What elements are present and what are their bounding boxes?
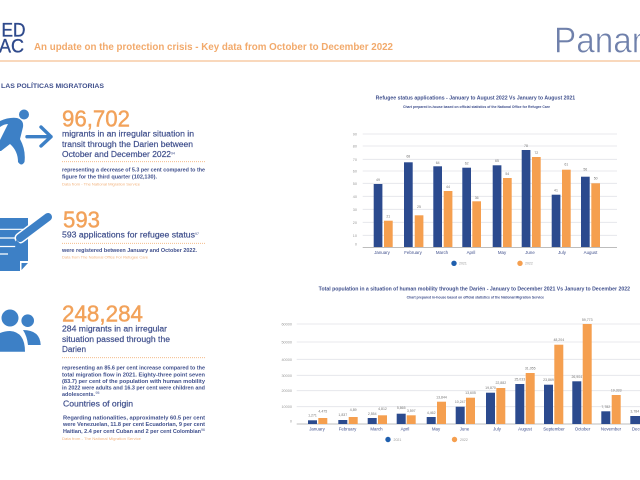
month labels: January	[309, 426, 326, 432]
month labels	[309, 426, 640, 432]
month labels: May	[432, 426, 441, 432]
month labels	[374, 250, 598, 255]
month labels: March	[370, 426, 383, 432]
legend	[451, 261, 533, 266]
value labels: 56	[583, 168, 587, 172]
legend: 2022	[525, 262, 533, 266]
lead text	[62, 325, 171, 354]
value labels: 3,597	[407, 409, 416, 413]
lead text: situation passed through the	[62, 335, 171, 344]
y axis labels: 90	[353, 132, 357, 136]
stat: 96,702: 96,702	[62, 106, 130, 132]
value labels: 72	[534, 151, 538, 155]
value labels: 62	[465, 162, 469, 166]
source: Data from - The National Migration Service	[62, 182, 140, 186]
month labels: August	[518, 426, 533, 432]
body text: were Venezuelan, 11.8 per cent Ecuadorian, 9 per cent	[62, 422, 205, 428]
value labels: 54	[505, 172, 509, 176]
source: Data from The National Office For Refugee Care	[62, 256, 148, 260]
month labels: May	[498, 250, 507, 255]
lead text	[62, 130, 194, 159]
month labels: September	[543, 426, 565, 432]
y axis labels: 10	[353, 234, 357, 238]
month labels: March	[436, 250, 449, 255]
y axis labels: 30000	[281, 374, 292, 378]
body text: in 2022 were adults and 16.3 per cent were children and	[62, 386, 205, 392]
source: Data from - The National Migration Service	[62, 437, 141, 441]
body text: representing an 85.6 per cent increase compared to the	[62, 366, 205, 372]
chart title: Refugee status applications - January to August 2022 Vs January to August 2021	[376, 96, 575, 102]
month labels: July	[558, 250, 567, 255]
value labels: 44	[446, 185, 450, 189]
chart subtitle: Chart prepared in-house based on official statistics of the National Office for Refugee Care	[403, 105, 550, 109]
lead text: 94	[171, 152, 175, 156]
month labels: October	[575, 426, 591, 432]
month labels: June	[525, 250, 535, 255]
y axis labels: 70	[353, 158, 357, 162]
value labels: 61	[564, 162, 568, 166]
y axis labels: 50	[353, 182, 357, 186]
icon: runner with arrow	[0, 110, 51, 164]
value labels: 4,89	[350, 408, 357, 412]
month labels: February	[339, 426, 357, 432]
y axis labels	[353, 132, 357, 246]
value labels: 68	[406, 154, 410, 158]
lead text: October and December 2022	[62, 150, 172, 159]
logo	[0, 21, 26, 58]
logo: ED	[2, 21, 26, 42]
value labels: 64	[436, 161, 440, 165]
body text: figure for the third quarter (102,130).	[62, 174, 158, 180]
lead text: 284 migrants in an irregular	[62, 325, 167, 334]
value labels: 78	[524, 144, 528, 148]
panel: refugee applications	[0, 206, 206, 272]
panel: total migrants	[0, 301, 206, 441]
value labels: 21	[386, 215, 390, 219]
body text: total migration flow in 2021. Eighty-three point seven	[62, 372, 205, 378]
value labels: 4,462	[427, 411, 436, 415]
value labels: 26,904	[571, 375, 582, 379]
legend	[385, 437, 468, 442]
value labels: 36	[475, 196, 479, 200]
value labels: 1,271	[308, 414, 317, 418]
value labels: 65	[495, 159, 499, 163]
value labels: 4,812	[378, 407, 387, 411]
value labels: 41	[554, 188, 558, 192]
icon: document and pen	[0, 217, 48, 272]
lead text: 593 applications for refugee status	[62, 231, 195, 240]
value labels: 19,870	[485, 386, 496, 390]
value labels: 7,782	[601, 405, 610, 409]
lead text: Darien	[62, 345, 86, 354]
y axis labels: 40	[353, 195, 357, 199]
y axis labels: 30	[353, 208, 357, 212]
y axis labels: 60	[353, 170, 357, 174]
y axis labels: 60000	[281, 322, 292, 326]
value labels: 10,247	[455, 400, 466, 404]
month labels: June	[460, 426, 470, 432]
month labels: January	[374, 250, 391, 255]
y axis labels: 20	[353, 221, 357, 225]
bars	[374, 150, 600, 247]
value labels: 50	[594, 176, 598, 180]
body text: 96	[201, 428, 205, 432]
body text: Regarding nationalities, approximately 60.5 per cent	[63, 415, 205, 421]
lead text: 97	[195, 232, 199, 236]
subheading: Countries of origin	[63, 400, 133, 409]
body text: representing a decrease of 5.3 per cent compared to the	[62, 168, 205, 174]
value labels: 3,784	[630, 410, 639, 414]
header	[0, 20, 640, 61]
legend: 2021	[394, 438, 401, 442]
value labels: 49	[376, 178, 380, 182]
value labels: 2,554	[368, 412, 377, 416]
bar chart: refugee status applications	[353, 96, 617, 266]
legend: 2021	[459, 262, 467, 266]
value labels: 23,869	[543, 378, 554, 382]
body text: adolescents.	[62, 392, 95, 398]
legend: 2022	[460, 438, 468, 442]
stat: 248,284: 248,284	[62, 301, 143, 327]
value labels: 25	[417, 205, 421, 209]
chart subtitle: Chart prepared in-house based on official statistics of the National Migration Service	[407, 296, 544, 300]
value labels: 4,475	[318, 410, 327, 414]
month labels: February	[404, 250, 423, 255]
lead text: migrants in an irregular situation in	[62, 130, 194, 139]
chart title: Total population in a situation of human mobility through the Darién - January to December 2021 Vs January to December 2022	[319, 286, 630, 292]
bars	[308, 324, 640, 424]
value labels: 19,333	[611, 388, 622, 392]
panel: darien transit	[0, 106, 206, 186]
body text: were registered between January and October 2022.	[61, 248, 198, 254]
value labels: 13,605	[465, 391, 476, 395]
section heading: LAS POLÍTICAS MIGRATORIAS	[1, 82, 104, 90]
value labels: 25,033	[514, 378, 525, 382]
body text	[62, 415, 205, 435]
body text: 95	[96, 391, 99, 395]
month labels: July	[493, 426, 502, 432]
y axis labels: 0	[355, 242, 357, 246]
value labels: 13,844	[436, 396, 447, 400]
body text: Haitian, 2.4 per cent Cuban and 2 per cent Colombian	[63, 429, 201, 435]
value labels: 31,055	[525, 366, 536, 370]
title: An update on the protection crisis - Key data from October to December 2022	[34, 41, 393, 53]
value labels: 5,865	[397, 406, 406, 410]
icon: people	[0, 310, 41, 352]
value labels: 48,204	[553, 338, 564, 342]
y axis labels: 20000	[281, 389, 292, 393]
y axis labels: 80	[353, 144, 357, 148]
stat: 593: 593	[63, 206, 100, 232]
month labels: April	[401, 426, 409, 432]
y axis labels	[281, 322, 292, 424]
y axis labels: 50000	[281, 340, 292, 344]
month labels: August	[584, 250, 598, 255]
month labels: April	[467, 250, 475, 255]
value labels: 1,837	[338, 413, 347, 417]
y axis labels: 40000	[281, 358, 292, 362]
bar chart: human mobility through the Darien	[281, 286, 640, 442]
body text	[62, 168, 205, 180]
y axis labels: 0	[290, 420, 292, 424]
value labels: 59,773	[582, 318, 593, 322]
month labels: November	[601, 426, 622, 432]
body text: (83.7) per cent of the population with human mobility	[62, 379, 205, 385]
value labels: 22,882	[495, 381, 506, 385]
value labels	[308, 318, 639, 418]
lead text: transit through the Darien between	[62, 140, 193, 149]
y axis labels: 10000	[281, 405, 292, 409]
body text	[62, 366, 205, 398]
value labels	[376, 144, 598, 219]
